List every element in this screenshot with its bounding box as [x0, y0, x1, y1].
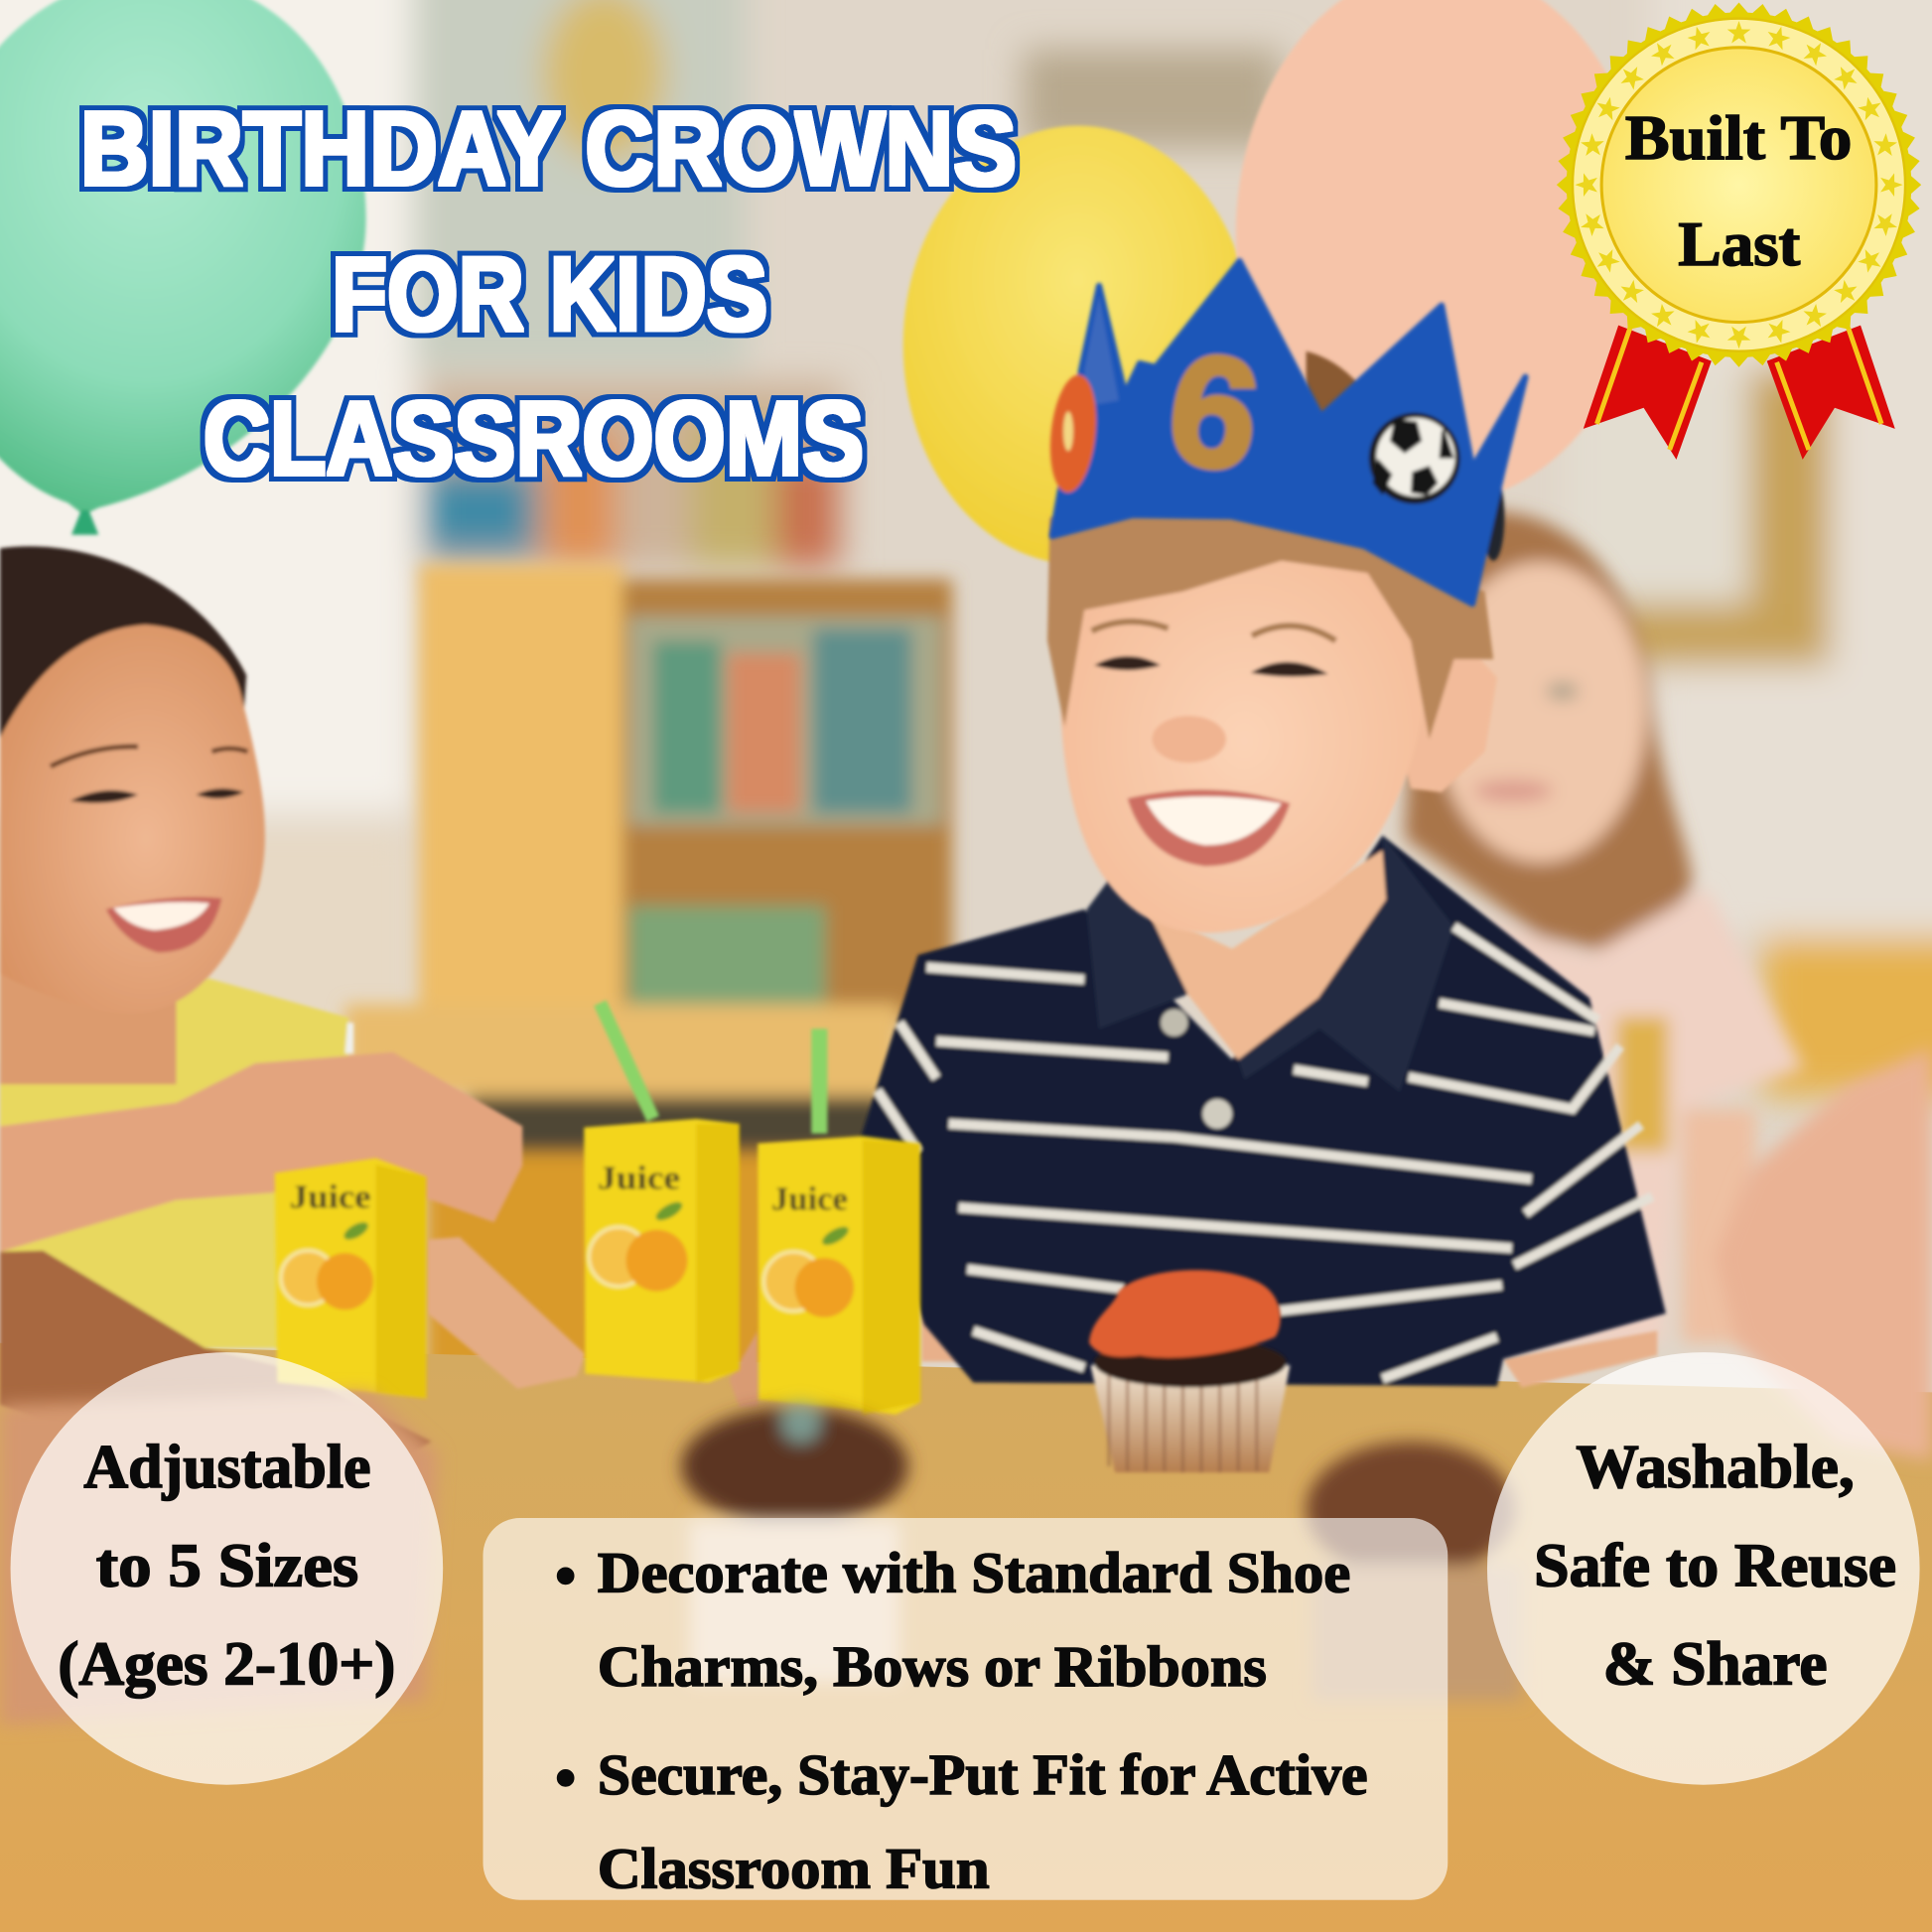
- left feature circle: [11, 1352, 443, 1785]
- ribbon left: [1584, 326, 1712, 460]
- bullet list: [558, 1540, 1368, 1900]
- badge text: [1625, 103, 1852, 279]
- blurred foreground cupcakes: [681, 1404, 1522, 1701]
- bookshelf: [345, 564, 952, 1374]
- peach balloon: [1236, 0, 1647, 502]
- title: FOR KIDS: [332, 237, 767, 353]
- badge: built to last: [1557, 2, 1921, 460]
- boy: [730, 261, 1666, 1407]
- green balloon: [0, 0, 366, 535]
- juice box 1: Juice: [290, 1178, 371, 1215]
- juice box 2: [584, 1003, 740, 1382]
- bullet list: Secure, Stay-Put Fit for Active: [598, 1742, 1368, 1807]
- crown: [1045, 261, 1525, 604]
- features panel: [483, 1518, 1448, 1900]
- charm: soccer ball: [1369, 413, 1460, 504]
- left circle text: [58, 1434, 395, 1699]
- juice box 3: Juice: [771, 1181, 848, 1218]
- boy head: [1047, 351, 1497, 933]
- right circle text: Washable,: [1576, 1434, 1855, 1501]
- gold seal: [1557, 2, 1921, 367]
- charm: orange flower: [1045, 372, 1101, 494]
- right hand: [1716, 1047, 1932, 1460]
- right circle text: & Share: [1603, 1631, 1828, 1699]
- juice box 2: Juice: [598, 1161, 680, 1197]
- ribbon right: [1767, 326, 1895, 460]
- left circle text: Adjustable: [83, 1434, 371, 1501]
- right feature circle: [1487, 1352, 1920, 1785]
- boy shirt: [860, 835, 1666, 1386]
- yellow balloon: [903, 126, 1253, 564]
- table: [0, 1343, 1932, 1932]
- cupcake: [1089, 1270, 1290, 1472]
- right circle text: [1534, 1434, 1896, 1699]
- boy arm and hand: [730, 1282, 1657, 1407]
- title: CLASSROOMS: [204, 381, 864, 497]
- background girl: [1405, 511, 1804, 1355]
- title: BIRTHDAY CROWNS: [80, 91, 1017, 207]
- left circle text: to 5 Sizes: [96, 1532, 358, 1599]
- foreground arm blur, left: [0, 1392, 438, 1725]
- badge text: Last: [1678, 209, 1800, 279]
- bullet list: Classroom Fun: [598, 1836, 990, 1900]
- juice box 1: [275, 1159, 426, 1399]
- badge text: Built To: [1625, 103, 1852, 173]
- right circle text: Safe to Reuse: [1534, 1532, 1896, 1599]
- left girl: [0, 546, 586, 1478]
- title: [80, 91, 1017, 497]
- bullet list: Charms, Bows or Ribbons: [598, 1634, 1267, 1699]
- left circle text: (Ages 2-10+): [58, 1631, 395, 1699]
- juice box 3: [758, 1029, 920, 1415]
- charm: number six: 6: [1159, 318, 1270, 505]
- bullet list: Decorate with Standard Shoe: [598, 1540, 1350, 1604]
